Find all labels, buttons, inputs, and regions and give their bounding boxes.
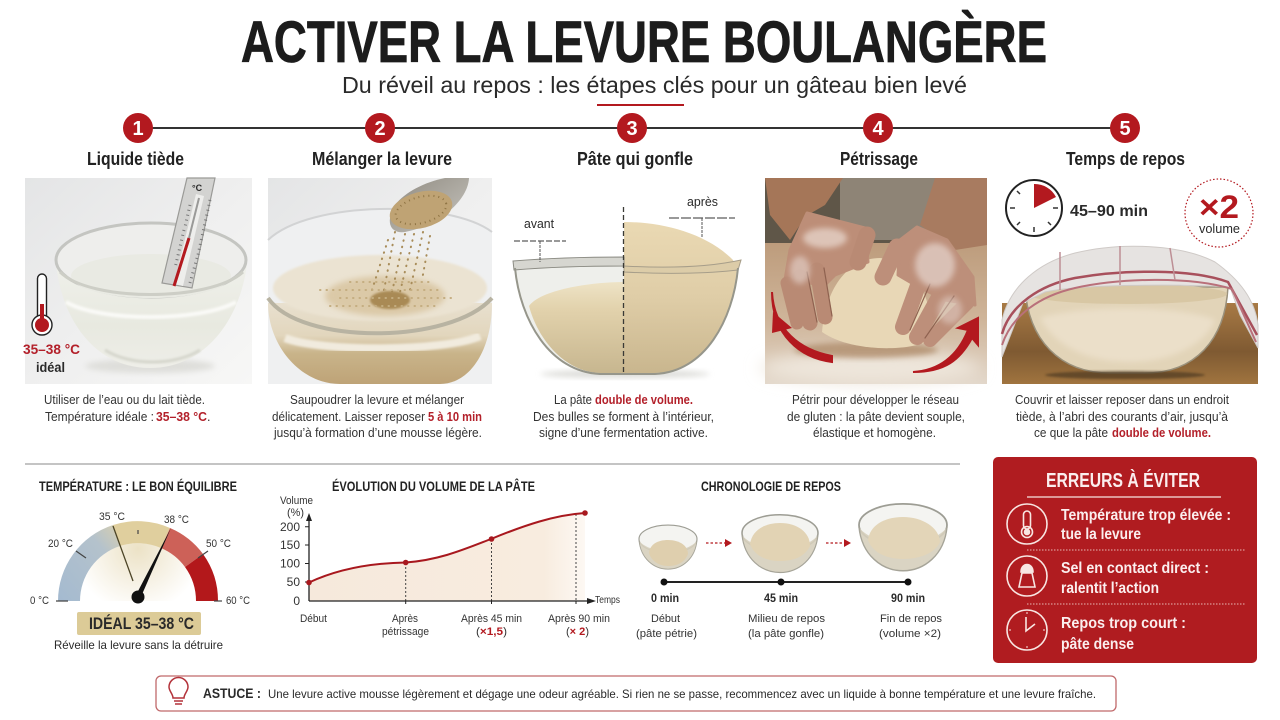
text: step 1 description: 35–38 °C bbox=[156, 410, 207, 424]
heading: step 3: Pâte qui gonfle bbox=[577, 149, 693, 169]
arrow: to 45 min bbox=[706, 539, 732, 547]
heading: step 2: Mélanger la levure bbox=[312, 149, 452, 169]
photo: dough before and after in bowl bbox=[513, 194, 741, 378]
tip text: Une levure active mousse légèrement et dégage une odeur agréable. Si rien ne se passe, recommencez avec un liquide à bonne température et une levure fraîche. bbox=[268, 687, 1096, 701]
caption: gauge: Réveille la levure sans la détruire bbox=[54, 638, 223, 652]
text: step 2 description: Saupoudrer la levure et mélanger bbox=[290, 393, 464, 407]
gauge labels: 20 °C bbox=[48, 538, 73, 550]
axis labels: Après bbox=[392, 613, 418, 625]
text: step 4 description: de gluten : la pâte devient souple, bbox=[787, 410, 965, 424]
panel: volume chart bbox=[280, 479, 620, 638]
step number 2: 2 bbox=[374, 118, 386, 140]
panel: temperature gauge bbox=[30, 479, 250, 659]
icon: thermometer bbox=[1007, 504, 1047, 544]
gauge labels: 38 °C bbox=[164, 514, 189, 526]
tip label: ASTUCE : bbox=[203, 685, 261, 701]
icon: spoon with yeast bbox=[385, 178, 469, 236]
labels: 90 min: Fin de repos bbox=[880, 613, 942, 625]
text: step 4 description bbox=[787, 393, 965, 440]
step number 5 bbox=[1110, 113, 1140, 143]
text: step 1 description bbox=[44, 393, 210, 424]
gauge chart bbox=[30, 511, 250, 659]
panel: mistakes to avoid bbox=[993, 457, 1257, 663]
item: salt contact: ralentit l’action bbox=[1061, 580, 1159, 597]
gauge labels: 60 °C bbox=[226, 595, 250, 607]
timeline bbox=[660, 578, 912, 586]
title: ACTIVER LA LEVURE BOULANGÈRE bbox=[241, 10, 1047, 75]
text: step 5 description: tiède, à l’abri des courants d’air, jusqu’à bbox=[1016, 410, 1228, 424]
photo: covered bowl on wood bbox=[1002, 246, 1258, 384]
heading: temperature: TEMPÉRATURE : LE BON ÉQUILIBRE bbox=[39, 479, 237, 494]
gauge labels: 0 °C bbox=[30, 595, 49, 607]
photo: bowl of warm liquid with thermometer bbox=[23, 178, 252, 384]
labels: 0 min: 0 min bbox=[651, 591, 679, 605]
step timeline bbox=[123, 113, 1140, 143]
panel: step 1 bbox=[23, 149, 252, 424]
right hand bbox=[883, 227, 975, 340]
item: too hot: Température trop élevée : bbox=[1061, 507, 1231, 524]
axis labels: Début bbox=[300, 613, 327, 625]
item: too hot: tue la levure bbox=[1061, 526, 1141, 543]
axis labels: Après 90 min bbox=[548, 613, 610, 625]
item: too hot bbox=[1061, 507, 1231, 543]
label: after bbox=[669, 194, 735, 238]
step number 4: 4 bbox=[872, 118, 884, 140]
text: step 1 description: . bbox=[207, 410, 210, 424]
step number 3: 3 bbox=[626, 118, 638, 140]
axis labels: 150 bbox=[280, 538, 300, 552]
text: step 5 description bbox=[1015, 393, 1229, 440]
axis labels: Après 45 min bbox=[461, 613, 522, 625]
icon: clock bbox=[1006, 180, 1062, 236]
axis labels: 100 bbox=[280, 556, 300, 570]
bowl at 45 min bbox=[742, 515, 818, 573]
step number 3 bbox=[617, 113, 647, 143]
subtitle: Du réveil au repos : les étapes clés pour un gâteau bien levé bbox=[342, 72, 967, 98]
item: short rest bbox=[1061, 615, 1186, 653]
panel: step 3 bbox=[513, 149, 741, 440]
step number 2 bbox=[365, 113, 395, 143]
text: step 2 description bbox=[272, 393, 482, 440]
text: step 5 description: ce que la pâte bbox=[1034, 426, 1108, 440]
callout: ideal temperature: 35–38 °C bbox=[23, 341, 80, 357]
labels: 45 min: 45 min bbox=[764, 591, 798, 605]
callout: ideal temperature: idéal bbox=[36, 359, 65, 375]
text: step 1 description: Température idéale : bbox=[45, 410, 154, 424]
step number 5: 5 bbox=[1119, 118, 1131, 140]
dough ball bbox=[822, 258, 931, 348]
left hand bbox=[785, 213, 868, 323]
item: salt contact bbox=[1061, 560, 1209, 597]
heading: rest timeline: CHRONOLOGIE DE REPOS bbox=[701, 479, 841, 494]
icon: glass thermometer bbox=[162, 178, 215, 288]
labels: 0 min: (pâte pétrie) bbox=[636, 628, 697, 640]
labels: 0 min: Début bbox=[651, 613, 680, 625]
arrows: kneading motion bbox=[772, 292, 978, 372]
icon: thermometer ideal temperature bbox=[32, 274, 52, 335]
label: before: avant bbox=[524, 216, 554, 231]
axis labels bbox=[280, 495, 620, 638]
axis labels: pétrissage bbox=[382, 626, 429, 638]
heading: mistakes: ERREURS À ÉVITER bbox=[1046, 469, 1200, 492]
label: after: après bbox=[687, 194, 718, 209]
text: step 3 description: Des bulles se forment à l’intérieur, bbox=[533, 410, 714, 424]
heading: volume chart: ÉVOLUTION DU VOLUME DE LA PÂTE bbox=[332, 479, 535, 494]
falling yeast grains bbox=[320, 232, 455, 306]
photo: hands kneading dough bbox=[760, 178, 987, 384]
text: step 3 description: double de volume. bbox=[595, 393, 693, 407]
line chart bbox=[280, 495, 620, 638]
badge: double volume: volume bbox=[1199, 221, 1240, 236]
text: step 3 description: signe d’une fermentation active. bbox=[539, 426, 708, 440]
text: step 2 description: 5 à 10 min bbox=[428, 410, 482, 424]
heading: step 5: Temps de repos bbox=[1066, 149, 1185, 169]
gauge labels: 50 °C bbox=[206, 538, 231, 550]
panel: rest timeline bbox=[636, 479, 947, 640]
badge: double volume bbox=[1185, 179, 1253, 247]
tea towel bbox=[1002, 246, 1258, 357]
axis labels: 50 bbox=[287, 575, 300, 589]
text: step 5 description: double de volume. bbox=[1112, 426, 1211, 440]
labels: 90 min: 90 min bbox=[891, 591, 925, 605]
panel: step 4 bbox=[760, 149, 987, 440]
labels: 45 min: Milieu de repos bbox=[748, 613, 826, 625]
badge: ideal range: IDÉAL 35–38 °C bbox=[89, 614, 194, 633]
badge: ideal range bbox=[77, 612, 201, 635]
text: step 1 description: Utiliser de l’eau ou du lait tiède. bbox=[44, 393, 205, 407]
panel: step 2 bbox=[268, 149, 492, 440]
label: before bbox=[514, 216, 566, 262]
badge: double volume: ×2 bbox=[1199, 189, 1239, 225]
icon: glass thermometer: °C bbox=[192, 183, 203, 193]
gauge labels bbox=[30, 511, 250, 607]
text: step 2 description: délicatement. Laisser reposer bbox=[272, 410, 425, 424]
panel: step 5 bbox=[1002, 149, 1258, 440]
callout: ideal temperature bbox=[23, 341, 80, 375]
heading: step 4: Pétrissage bbox=[840, 149, 918, 169]
gauge labels: 35 °C bbox=[99, 511, 125, 523]
axis labels: 200 bbox=[280, 520, 300, 534]
labels: 0 min bbox=[636, 591, 697, 640]
icon: light bulb bbox=[169, 678, 188, 704]
axis labels: Volume bbox=[280, 495, 313, 507]
arrow: to 90 min bbox=[826, 539, 851, 547]
bowl at 0 min bbox=[639, 525, 697, 569]
text: step 4 description: Pétrir pour développer le réseau bbox=[792, 393, 959, 407]
text: step 3 description: La pâte bbox=[554, 393, 592, 407]
axis labels: (%) bbox=[287, 507, 304, 519]
step number 1 bbox=[123, 113, 153, 143]
step number 1: 1 bbox=[132, 118, 144, 140]
text: step 2 description: jusqu’à formation d’une mousse légère. bbox=[273, 426, 482, 440]
step number 4 bbox=[863, 113, 893, 143]
text: step 3 description bbox=[533, 393, 714, 440]
text: step 5 description: Couvrir et laisser reposer dans un endroit bbox=[1015, 393, 1229, 407]
text: rest duration: 45–90 min bbox=[1070, 203, 1148, 220]
labels: 90 min bbox=[879, 591, 942, 640]
axis labels: Temps bbox=[595, 595, 620, 606]
bowl at 90 min bbox=[859, 504, 947, 571]
labels: 45 min: (la pâte gonfle) bbox=[748, 628, 824, 640]
icon: clock bbox=[1007, 610, 1047, 650]
axis labels: (×1,5) bbox=[476, 626, 507, 638]
text: step 4 description: élastique et homogène. bbox=[813, 426, 936, 440]
axis labels: 0 bbox=[293, 594, 300, 608]
labels: 45 min bbox=[748, 591, 826, 640]
photo: yeast poured into liquid bbox=[268, 178, 492, 384]
item: short rest: pâte dense bbox=[1061, 636, 1134, 653]
labels: 90 min: (volume ×2) bbox=[879, 628, 941, 640]
item: short rest: Repos trop court : bbox=[1061, 615, 1186, 632]
icon: salt shaker bbox=[1007, 556, 1047, 596]
item: salt contact: Sel en contact direct : bbox=[1061, 560, 1209, 577]
heading: step 1: Liquide tiède bbox=[87, 149, 184, 169]
callout: tip bbox=[156, 676, 1116, 711]
axis labels: (× 2) bbox=[566, 626, 589, 638]
